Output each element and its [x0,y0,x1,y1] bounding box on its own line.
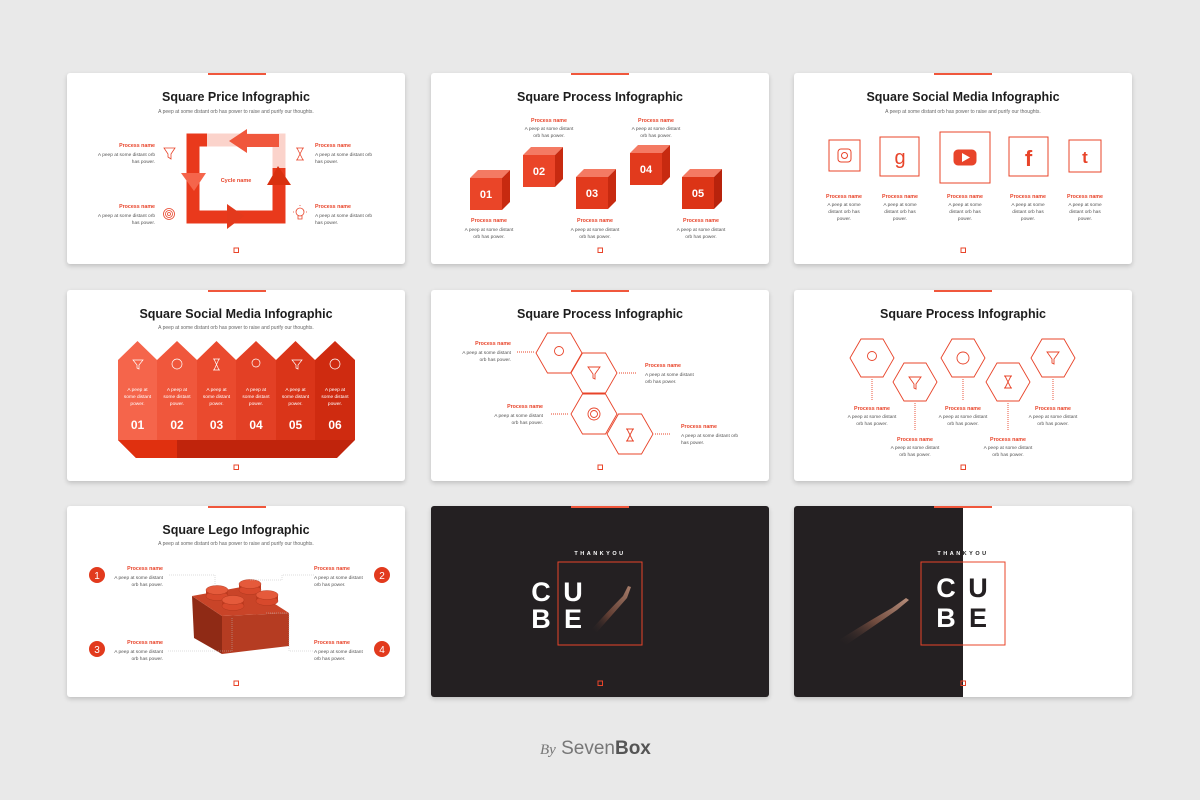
labels: power. [1021,216,1035,222]
labels: Process name [638,118,674,124]
column chart: power. [328,401,342,407]
CUBE box: E [969,603,987,633]
slide 3: Square Social Media Infographic (icons): t [1082,148,1088,167]
labels [848,406,1078,458]
labels: power. [837,216,851,222]
slide 7: Square Lego Infographic: A peep at some distant orb has power to raise and purify our thoughts. [158,541,314,547]
column chart: 01 [131,418,144,432]
labels: A peep at some [948,202,982,208]
slide 4: Square Social Media Infographic (columns) [67,290,405,481]
labels: A peep at some distant [1029,414,1078,420]
labels: Process name [507,404,543,410]
cubes: 02 [533,166,545,178]
right labels: A peep at some distant orb [315,213,372,219]
page marker [234,248,238,252]
labels: Process name [945,406,981,412]
labels: distant orb has [949,209,981,215]
labels: Process name [681,424,717,430]
title: Square Social Media Infographic [866,90,1060,104]
right labels: has power. [315,159,338,165]
slide 3: Square Social Media Infographic (icons): f [1025,146,1033,171]
column chart: some distant [163,394,191,400]
cycle diagram [181,129,291,229]
labels: orb has power. [132,582,163,588]
labels: A peep at some distant [314,649,363,655]
numbered circles [89,567,390,657]
title: Square Process Infographic [880,307,1046,321]
cubes: 03 [586,188,598,200]
labels: orb has power. [314,582,345,588]
column chart: power. [288,401,303,407]
labels: orb has power. [645,379,676,385]
CUBE box [921,562,1005,645]
labels: orb has power. [685,234,717,240]
labels: distant orb has [1069,209,1101,215]
labels: A peep at some distant [939,414,988,420]
labels: Process name [127,566,163,572]
labels: A peep at some distant [645,372,694,378]
CUBE box: U [563,577,583,607]
column chart: 02 [170,418,184,432]
thank you text: THANKYOU [937,551,989,557]
cubes: 01 [480,189,492,201]
labels: Process name [897,437,933,443]
labels: Process name [475,341,511,347]
column chart: 03 [210,418,223,432]
column chart [118,341,355,458]
subtitle: A peep at some distant orb has power to raise and purify our thoughts. [158,109,314,115]
labels: distant orb has [828,209,860,215]
labels [462,341,738,446]
column chart: some distant [321,394,349,400]
column chart: some distant [124,394,152,400]
column chart: A peep at [127,387,148,393]
labels: orb has power. [579,234,611,240]
left labels: A peep at some distant orb [98,152,155,158]
labels: Process name [882,194,918,200]
right labels: Process name [315,143,351,149]
cubes [470,145,722,210]
labels: A peep at some distant [677,227,726,233]
column chart: 04 [249,418,263,432]
labels: orb has power. [512,420,543,426]
slide 2: Square Process Infographic (cubes) [431,73,769,264]
column chart: power. [170,401,184,407]
labels: orb has power. [640,133,672,139]
labels: Process name [1035,406,1071,412]
right labels: has power. [315,220,338,226]
labels: A peep at some distant [632,126,681,132]
labels: A peep at some distant [462,350,512,356]
labels: Process name [531,118,567,124]
labels: orb has power. [992,452,1024,458]
labels: orb has power. [1037,421,1069,427]
CUBE box: B [936,603,956,633]
labels: Process name [127,640,163,646]
labels: Process name [990,437,1026,443]
hand [591,586,631,632]
labels: A peep at some distant [314,575,363,581]
labels: Process name [577,218,613,224]
cycle diagram: Cycle name [221,178,251,184]
CUBE box: U [968,573,988,603]
numbered circles: 1 [94,571,100,582]
labels [114,566,363,662]
thank you text: THANKYOU [574,551,626,557]
footer brand: By SevenBox [540,738,651,759]
slide 4: Square Social Media Infographic (columns): A peep at some distant orb has power to raise and purify our thoughts. [158,325,314,331]
social icons [829,132,1101,183]
column chart: A peep at [325,387,346,393]
hexagons [517,333,671,454]
slide 1: Square Price Infographic [67,73,405,264]
labels: Process name [854,406,890,412]
labels: A peep at some distant orb [681,433,738,439]
column chart: some distant [203,394,231,400]
labels [826,194,1103,222]
column chart: some distant [242,394,270,400]
title: Square Lego Infographic [162,523,310,537]
numbered circles: 2 [379,571,385,582]
title: Square Process Infographic [517,307,683,321]
cubes: 04 [640,164,653,176]
slide 3: Square Social Media Infographic (icons): A peep at some distant orb has power to raise and purify our thoughts. [885,109,1041,115]
column chart: 06 [328,418,342,432]
labels: has power. [681,440,704,446]
labels: orb has power. [899,452,931,458]
icons [164,148,307,220]
column chart: A peep at [285,387,306,393]
thank you text [937,551,986,555]
labels: Process name [1010,194,1046,200]
left labels: A peep at some distant orb [98,213,155,219]
column chart: A peep at [167,387,188,393]
right labels: A peep at some distant orb [315,152,372,158]
cubes: 05 [692,188,704,200]
labels: power. [1078,216,1092,222]
column chart: A peep at [246,387,267,393]
hand [839,598,909,645]
column chart: power. [130,401,145,407]
column chart: power. [209,401,224,407]
column chart: some distant [282,394,310,400]
column chart: A peep at [206,387,227,393]
labels: orb has power. [132,656,163,662]
thank you text: THANKYOU [937,551,989,557]
left labels [98,143,155,226]
labels: A peep at some distant [465,227,514,233]
labels [465,118,726,240]
labels: orb has power. [473,234,505,240]
CUBE box: C [936,573,956,603]
labels: power. [958,216,972,222]
title: Square Process Infographic [517,90,683,104]
labels: Process name [314,640,350,646]
labels: orb has power. [533,133,565,139]
labels: orb has power. [947,421,979,427]
slide 3: Square Social Media Infographic (icons): g [894,147,906,169]
left labels: has power. [132,159,155,165]
labels: A peep at some distant [571,227,620,233]
labels: A peep at some distant [525,126,574,132]
right labels: Process name [315,204,351,210]
lego brick [167,575,314,654]
labels: A peep at some distant [891,445,940,451]
labels: Process name [826,194,862,200]
labels: A peep at some [1011,202,1045,208]
labels: Process name [645,363,681,369]
CUBE box: C [531,577,551,607]
column chart: power. [249,401,263,407]
title: Square Social Media Infographic [139,307,333,321]
slide 9: Thank you split [794,506,1132,697]
labels: orb has power. [314,656,345,662]
hexagons [850,339,1075,431]
labels: orb has power. [856,421,888,427]
column chart: 05 [289,418,302,432]
numbered circles: 4 [379,645,385,656]
labels: A peep at some [883,202,917,208]
labels: Process name [683,218,719,224]
labels: orb has power. [480,357,511,363]
labels: A peep at some [827,202,861,208]
labels: Process name [314,566,350,572]
labels: A peep at some distant [494,413,544,419]
labels: power. [893,216,907,222]
labels: A peep at some distant [114,649,164,655]
labels: A peep at some distant [984,445,1033,451]
left labels: Process name [119,143,155,149]
numbered circles: 3 [94,645,100,656]
slide 8: Thank you dark [431,506,769,697]
left labels: has power. [132,220,155,226]
labels: A peep at some [1068,202,1102,208]
labels: Process name [471,218,507,224]
right labels [315,143,372,226]
slide 6: Square Process Infographic (hex row) [794,290,1132,481]
labels: A peep at some distant [114,575,164,581]
slide 3: Square Social Media Infographic (icons) [794,73,1132,264]
CUBE box: E [564,604,582,634]
title: Square Price Infographic [162,90,310,104]
slide 5: Square Process Infographic (hex chain) [431,290,769,481]
labels: distant orb has [884,209,916,215]
labels: Process name [947,194,983,200]
left labels: Process name [119,204,155,210]
CUBE box [531,562,642,645]
labels: distant orb has [1012,209,1044,215]
labels: A peep at some distant [848,414,897,420]
slide 7: Square Lego Infographic [67,506,405,697]
labels: Process name [1067,194,1103,200]
CUBE box: B [531,604,551,634]
